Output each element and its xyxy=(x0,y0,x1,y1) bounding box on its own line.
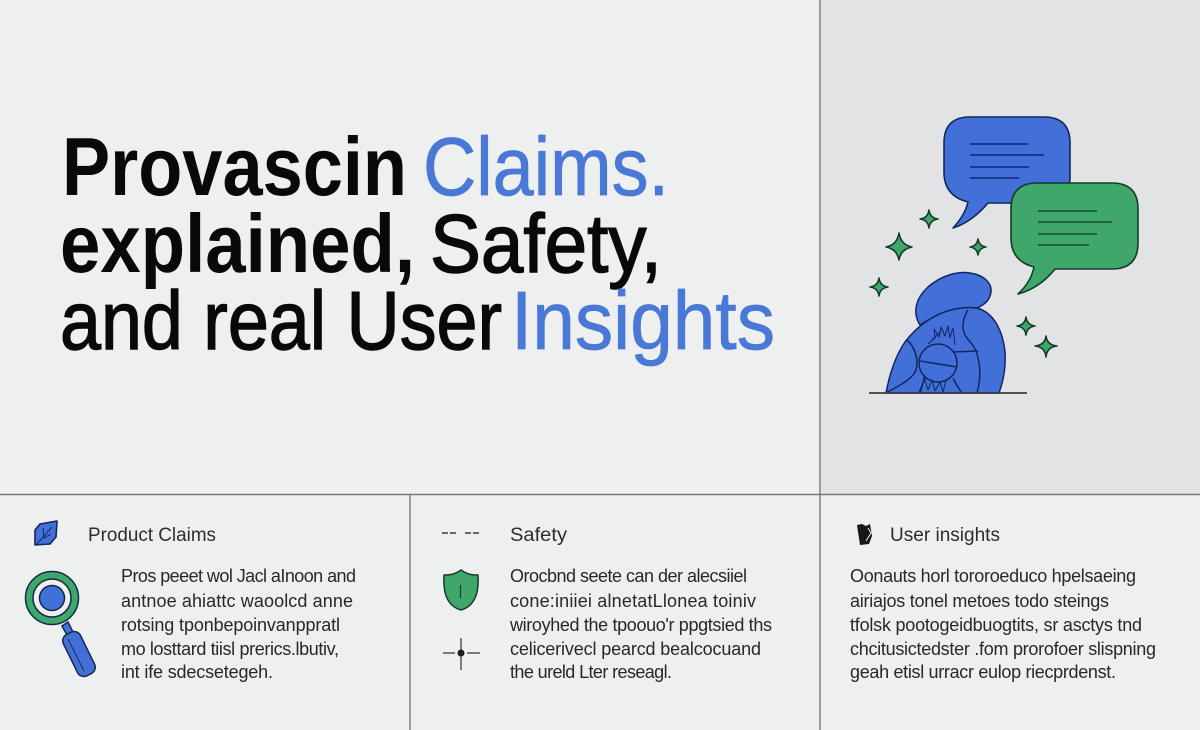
body text: safety: celicerivecl pearcd bealcocuand xyxy=(510,639,761,659)
body text: product claims: antnoe ahiattc waoolcd anne xyxy=(121,591,353,611)
body text: safety: the ureld Lter reseagl. xyxy=(510,662,672,682)
title line 2 regular part: Safety, xyxy=(430,197,662,290)
icon: user glyph xyxy=(857,524,872,545)
icon: green shield xyxy=(444,570,478,610)
panel: user insights xyxy=(850,524,1156,682)
title xyxy=(60,120,775,367)
body text: product claims: Pros peeet wol Jacl aInoon and xyxy=(121,566,356,586)
body text: safety: Orocbnd seete can der alecsiiel xyxy=(510,566,747,586)
body text: user insights: tfolsk pootogeidbuogtits, sr asctys tnd xyxy=(850,615,1142,635)
body text: user insights: Oonauts horl tororoeduco hpelsaeing xyxy=(850,566,1136,586)
body text: product claims: rotsing tponbepoinvanppratl xyxy=(121,615,340,635)
title line 3 accent: Insights xyxy=(511,274,775,367)
green speech bubble xyxy=(1011,183,1138,294)
body text: user insights: airiajos tonel metoes todo steings xyxy=(850,591,1109,611)
title line 1 accent: Claims. xyxy=(423,120,669,213)
ground line xyxy=(869,392,1027,394)
title line 3: and real User xyxy=(60,274,502,367)
body text: product claims: int ife sdecsetegeh. xyxy=(121,662,273,682)
body text: user insights: geah etisl urracr eulop riecprdenst. xyxy=(850,662,1116,682)
body text: user insights: chcitusictedster .fom prorofoer slispning xyxy=(850,639,1156,659)
body text: safety: wiroyhed the tpoouo'r ppgtsied ths xyxy=(509,615,772,635)
sparkles xyxy=(870,210,1057,357)
heading: safety: Safety xyxy=(510,525,568,546)
heading: product claims: Product Claims xyxy=(88,525,216,546)
title line 1: Provascin xyxy=(62,120,407,213)
body text: safety: cone:iniiei alnetatLlonea toiniv xyxy=(510,591,756,611)
icon: small blue tag xyxy=(35,521,57,545)
panel: safety xyxy=(442,525,772,682)
panel: product claims xyxy=(26,521,356,682)
icon: magnifying glass xyxy=(26,572,98,679)
panel: illustration background xyxy=(820,0,1200,494)
body text: product claims: mo losttard tiisl prerics.lbutiv, xyxy=(121,639,339,659)
icon: dashes xyxy=(442,532,481,534)
title line 2 bold part: explained, xyxy=(60,197,415,290)
heading: user insights: User insights xyxy=(890,525,1000,546)
body text: safety xyxy=(509,566,772,682)
person xyxy=(886,273,1005,393)
body text: product claims xyxy=(121,566,356,682)
icon: crosshair xyxy=(443,638,480,670)
body text: user insights xyxy=(850,566,1156,682)
blue speech bubble xyxy=(944,117,1070,228)
illustration: speech bubbles and person xyxy=(869,117,1138,393)
